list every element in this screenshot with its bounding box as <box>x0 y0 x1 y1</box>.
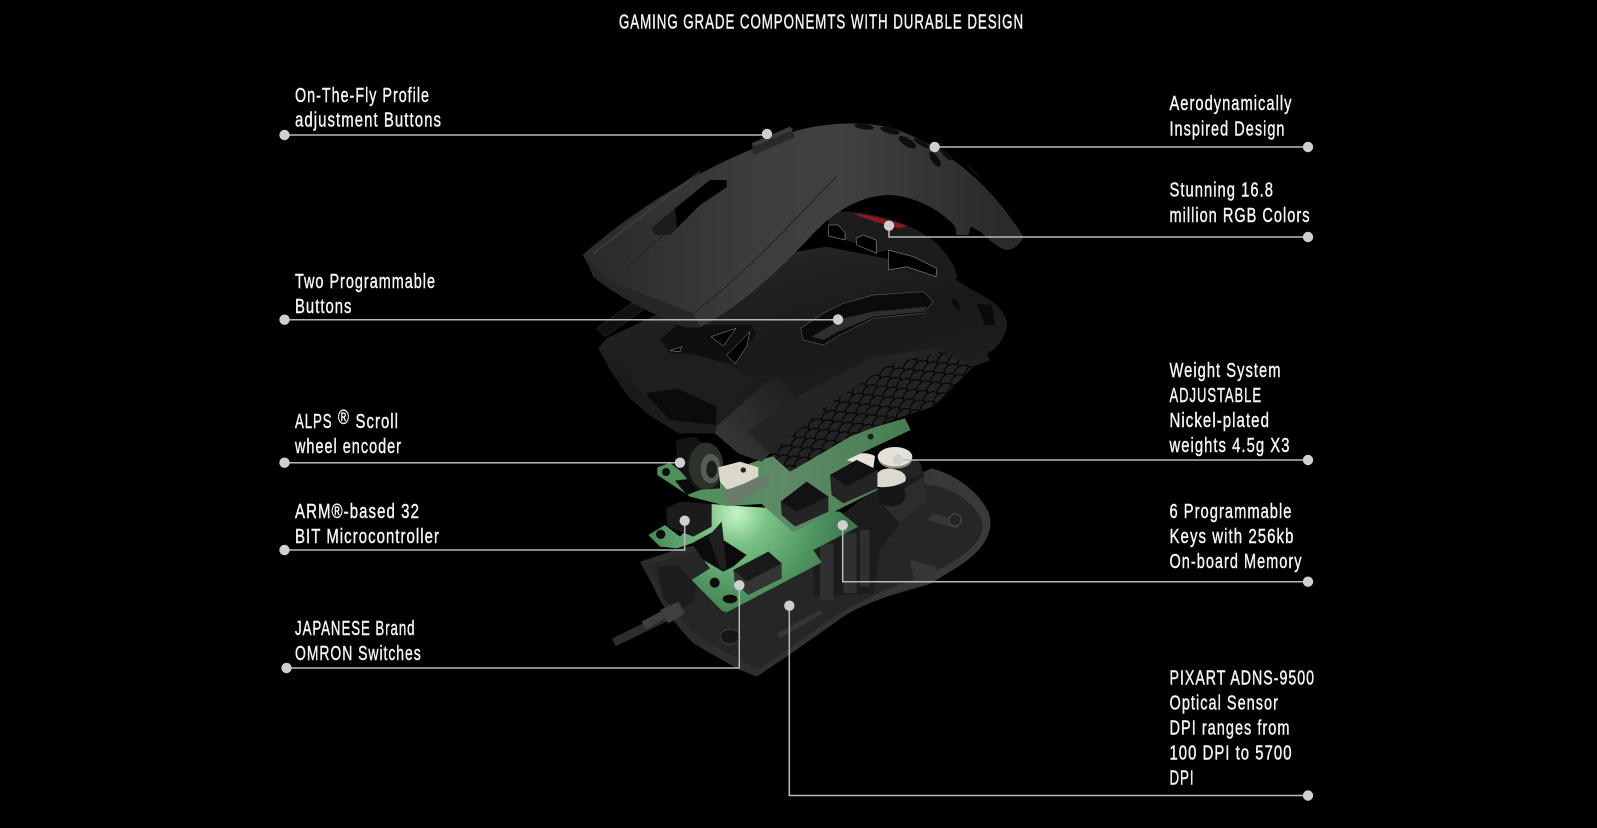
label: RGB colors: million RGB Colors <box>1170 205 1310 227</box>
label: RGB colors: Stunning 16.8 <box>1170 180 1274 202</box>
label: Optical sensor <box>1170 668 1315 790</box>
label: ALPS Scroll wheel encoder: ALPS <box>295 411 332 433</box>
label: ALPS Scroll wheel encoder: wheel encoder <box>294 436 402 458</box>
label: Two Programmable Buttons <box>295 271 436 318</box>
profile button <box>752 127 795 155</box>
label: Optical sensor: 100 DPI to 5700 <box>1170 742 1292 764</box>
label: Programmable keys: On-board Memory <box>1170 551 1302 573</box>
upper circuit board and parts <box>657 418 911 532</box>
scroll wheel <box>676 437 723 490</box>
label: Weight system <box>1169 360 1290 457</box>
omron switch <box>733 552 782 595</box>
callout line and dots: ALPS scroll encoder <box>279 458 685 468</box>
side slot <box>652 180 727 235</box>
grip texture <box>770 352 973 472</box>
label: ARM microcontroller: BIT Microcontroller <box>295 526 440 548</box>
side buttons <box>801 292 933 345</box>
label: Weight system: weights 4.5g X3 <box>1169 435 1290 457</box>
label: On-The-Fly Profile: On-The-Fly Profile <box>295 85 430 107</box>
rgb light ring <box>828 212 957 283</box>
rear slat <box>597 303 643 337</box>
shell body <box>598 247 1007 472</box>
lower circuit board <box>648 502 858 612</box>
label: Aerodynamically Inspired Design: Aerodynamically <box>1170 93 1292 115</box>
label: Weight system: Weight System <box>1170 360 1282 382</box>
label: Weight system: ADJUSTABLE <box>1170 385 1262 407</box>
mouse bottom base and cable <box>614 447 990 677</box>
rear lobe holes <box>950 298 995 325</box>
weight pillar <box>813 470 927 597</box>
label: Aerodynamically Inspired Design: Inspired Design <box>1170 118 1286 140</box>
microcontroller block <box>666 502 712 537</box>
label: OMRON switches <box>295 618 422 665</box>
callout line and dots: RGB colors <box>884 220 1313 242</box>
label: Two Programmable Buttons: Buttons <box>295 296 352 318</box>
inner cavity <box>615 340 757 426</box>
label: ALPS Scroll wheel encoder: Scroll <box>356 411 399 433</box>
label: Programmable keys: 6 Programmable <box>1170 501 1292 523</box>
seam lines <box>610 177 837 313</box>
label: Programmable keys: Keys with 256kb <box>1170 526 1294 548</box>
callout line and dots: Two Programmable Buttons <box>279 314 843 325</box>
encoder bracket <box>718 462 758 489</box>
label: ALPS Scroll wheel encoder <box>294 407 402 458</box>
title: GAMING GRADE COMPONEMTS WITH DURABLE DESIGN <box>619 12 1024 34</box>
label: RGB colors <box>1170 180 1310 227</box>
label: ARM microcontroller: ARM®-based 32 <box>295 501 420 523</box>
middle shell <box>597 247 1007 472</box>
exploded mouse illustration <box>583 123 1023 677</box>
board switches <box>781 482 828 527</box>
label: Optical sensor: PIXART ADNS-9500 <box>1170 668 1315 690</box>
label: OMRON switches: JAPANESE Brand <box>295 618 416 640</box>
label: OMRON switches: OMRON Switches <box>295 643 422 665</box>
lower skirt <box>583 255 700 327</box>
label: On-The-Fly Profile: adjustment Buttons <box>295 110 442 132</box>
cable <box>614 610 680 642</box>
label: ALPS Scroll wheel encoder: ® <box>338 407 350 429</box>
label: Optical sensor: Optical Sensor <box>1170 692 1279 714</box>
vent recess <box>660 325 757 365</box>
weights <box>842 447 922 507</box>
base plate <box>640 468 990 677</box>
side vents <box>670 328 750 364</box>
label: Two Programmable Buttons: Two Programmable <box>295 271 436 293</box>
label: Aerodynamically Inspired Design <box>1170 93 1292 140</box>
callout line and dots: ARM microcontroller <box>279 516 690 555</box>
callout line and dots: Aerodynamic design <box>930 142 1313 152</box>
label: Weight system: Nickel-plated <box>1170 410 1270 432</box>
callout line and dots: Programmable keys <box>838 520 1313 587</box>
label: Optical sensor: DPI <box>1170 768 1194 790</box>
top shell <box>583 123 1023 327</box>
callout line and dots: Weight system <box>893 454 1313 465</box>
label: On-The-Fly Profile <box>295 85 442 132</box>
encoder cutout <box>692 532 747 572</box>
label: ARM microcontroller <box>295 501 440 548</box>
callout line and dots: On-The-Fly Profile <box>279 129 772 140</box>
callout line and dots: OMRON switches <box>281 580 744 673</box>
grey front face <box>715 373 797 462</box>
vent holes <box>854 123 981 178</box>
callout line and dots: Optical sensor <box>784 600 1313 801</box>
label: Optical sensor: DPI ranges from <box>1170 718 1290 740</box>
label: Programmable keys <box>1170 501 1302 573</box>
